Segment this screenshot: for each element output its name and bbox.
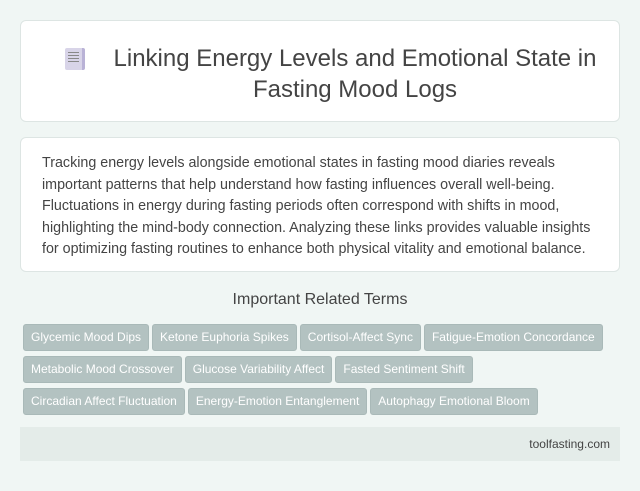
footer xyxy=(20,427,620,461)
tags row 3: Circadian Affect Fluctuation xyxy=(31,394,177,408)
tags row 2 xyxy=(23,356,473,383)
tags row 1: Cortisol-Affect Sync xyxy=(308,330,413,344)
tags row 1: Ketone Euphoria Spikes xyxy=(160,330,289,344)
tags row 2: Glucose Variability Affect xyxy=(193,362,324,376)
heading: related terms: Important Related Terms xyxy=(233,291,407,308)
description card xyxy=(20,137,620,272)
tags row 3: Energy-Emotion Entanglement xyxy=(196,394,359,408)
tags row 1 xyxy=(23,324,603,351)
tags row 3 xyxy=(23,388,538,415)
footer source: toolfasting.com xyxy=(529,437,610,451)
description text: Tracking energy levels alongside emotional states in fasting mood diaries reveals important patterns that help understand how fasting influences overall well-being. Fluctuations in energy during fasting periods often correspond with shifts in mood, highlighting the mind-body connection. Analyzing these links provides valuable insights for optimizing fasting routines to enhance both physical vitality and emotional balance. xyxy=(42,155,590,257)
tags row 1: Fatigue-Emotion Concordance xyxy=(432,330,595,344)
tags row 3: Autophagy Emotional Bloom xyxy=(378,394,530,408)
tags row 1: Glycemic Mood Dips xyxy=(31,330,141,344)
icon: scroll xyxy=(65,48,85,70)
title: Linking Energy Levels and Emotional State in Fasting Mood Logs xyxy=(114,45,596,103)
title card xyxy=(20,20,620,122)
tags row 2: Fasted Sentiment Shift xyxy=(343,362,465,376)
tags row 2: Metabolic Mood Crossover xyxy=(31,362,174,376)
